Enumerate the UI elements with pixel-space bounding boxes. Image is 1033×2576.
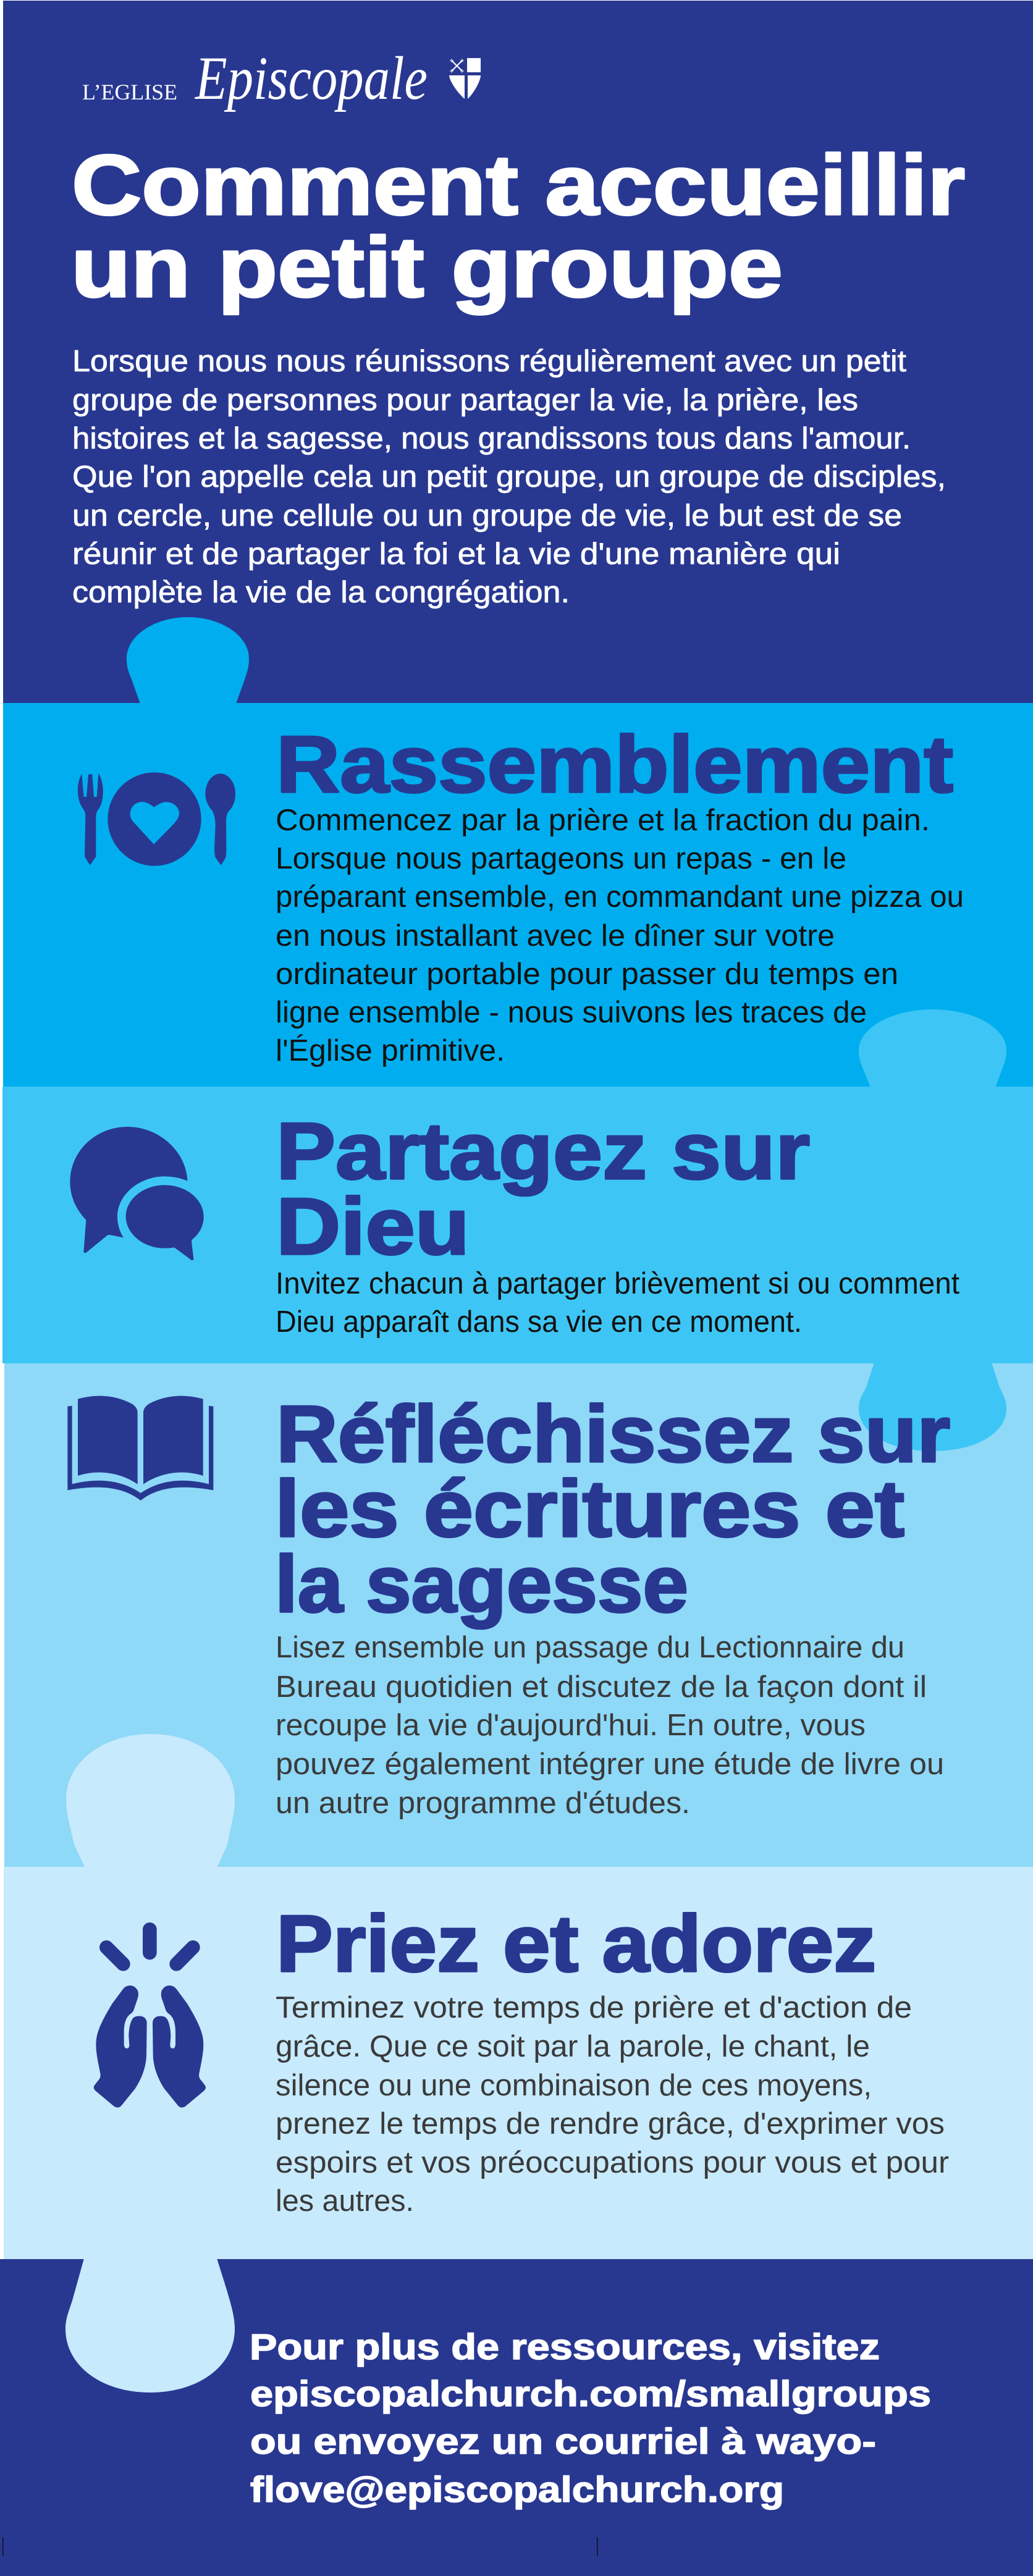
body text: Réfléchissez: recoupe la vie d'aujourd'hui. En outre, vous xyxy=(276,1709,866,1742)
body text: Rassemblement: en nous installant avec le dîner sur votre xyxy=(276,919,835,953)
footer call to action xyxy=(250,2327,931,2510)
body text: Rassemblement: Commencez par la prière et la fraction du pain. xyxy=(276,804,930,837)
title: Comment accueillir xyxy=(72,138,965,233)
panel: intro header xyxy=(3,1,1033,704)
intro text: un cercle, une cellule ou un groupe de vie, le but est de se xyxy=(72,499,902,532)
body text: Réfléchissez: un autre programme d'études. xyxy=(276,1787,690,1820)
panel: Rassemblement xyxy=(3,617,1033,1087)
logo: L'Eglise Episcopale xyxy=(82,44,481,112)
body text: Rassemblement: l'Église primitive. xyxy=(276,1034,505,1067)
heading: Partagez sur Dieu: Partagez sur xyxy=(276,1106,810,1196)
heading: Partagez sur Dieu xyxy=(276,1106,810,1271)
logo: L'Eglise Episcopale: Episcopale xyxy=(194,44,428,112)
body text: Priez et adorez: prenez le temps de rendre grâce, d'exprimer vos xyxy=(276,2107,945,2140)
body text: Priez et adorez: Terminez votre temps de prière et d'action de xyxy=(276,1991,912,2024)
intro text: groupe de personnes pour partager la vie, la prière, les xyxy=(72,384,858,417)
body text: Réfléchissez: Bureau quotidien et discutez de la façon dont il xyxy=(276,1670,927,1704)
puzzle tab: Priez down xyxy=(65,2258,235,2393)
intro text: réunir et de partager la foi et la vie d'une manière qui xyxy=(72,537,840,571)
heading: Priez et adorez: Priez et adorez xyxy=(276,1898,876,1989)
icon: speech bubbles xyxy=(70,1127,204,1260)
body text: Réfléchissez: Lisez ensemble un passage du Lectionnaire du xyxy=(276,1631,904,1664)
footer call to action: flove@episcopalchurch.org xyxy=(250,2470,784,2510)
body text: Rassemblement xyxy=(276,804,964,1067)
puzzle tab: Partagez down xyxy=(859,1363,1006,1451)
title: un petit groupe xyxy=(71,220,783,315)
icon: open book xyxy=(67,1396,213,1501)
panel: Partagez sur Dieu xyxy=(2,1009,1033,1363)
intro text: Lorsque nous nous réunissons régulièrement avec un petit xyxy=(72,345,906,378)
footer call to action: episcopalchurch.com/smallgroups xyxy=(250,2374,931,2414)
body text: Priez et adorez: espoirs et vos préoccupations pour vous et pour xyxy=(276,2146,949,2179)
footer call to action: ou envoyez un courriel à wayo- xyxy=(250,2422,876,2462)
heading: Réfléchissez: la sagesse xyxy=(275,1539,688,1629)
body text: Rassemblement: préparant ensemble, en commandant une pizza ou xyxy=(276,880,964,914)
puzzle tab: Priez up xyxy=(66,1734,235,1868)
puzzle tab: Partagez up xyxy=(859,1009,1006,1087)
intro text xyxy=(72,345,946,609)
panel: footer xyxy=(0,2258,1033,2576)
body text: Priez et adorez: les autres. xyxy=(276,2184,414,2218)
footer call to action: Pour plus de ressources, visitez xyxy=(250,2327,880,2367)
body text: Rassemblement: ligne ensemble - nous suivons les traces de xyxy=(276,996,867,1029)
title xyxy=(71,138,965,315)
body text: Priez et adorez xyxy=(276,1991,949,2218)
panel: Priez et adorez xyxy=(4,1734,1033,2259)
logo: L'Eglise Episcopale: L’EGLISE xyxy=(82,80,177,104)
body text: Réfléchissez xyxy=(276,1631,944,1820)
body text: Rassemblement: Lorsque nous partageons un repas - en le xyxy=(276,842,846,875)
heading: Rassemblement: Rassemblement xyxy=(276,719,953,809)
body text: Réfléchissez: pouvez également intégrer une étude de livre ou xyxy=(276,1748,944,1781)
body text: Priez et adorez: grâce. Que ce soit par la parole, le chant, le xyxy=(276,2030,870,2063)
intro text: histoires et la sagesse, nous grandissons tous dans l'amour. xyxy=(72,422,911,455)
body text: Partagez sur Dieu: Dieu apparaît dans sa vie en ce moment. xyxy=(276,1305,802,1339)
heading: Partagez sur Dieu: Dieu xyxy=(276,1181,470,1271)
intro text: complète la vie de la congrégation. xyxy=(72,576,570,609)
icon: plate with heart, fork and spoon xyxy=(78,772,235,866)
body text: Rassemblement: ordinateur portable pour passer du temps en xyxy=(276,958,898,991)
body text: Partagez sur Dieu xyxy=(276,1267,959,1339)
puzzle tab: Rassemblement xyxy=(127,617,249,704)
icon: praying hands xyxy=(94,1929,206,2108)
intro text: Que l'on appelle cela un petit groupe, un groupe de disciples, xyxy=(72,460,946,494)
body text: Priez et adorez: silence ou une combinaison de ces moyens, xyxy=(276,2069,872,2102)
heading: Réfléchissez xyxy=(275,1389,950,1629)
panel: Réfléchissez xyxy=(4,1363,1033,1867)
body text: Partagez sur Dieu: Invitez chacun à partager brièvement si ou comment xyxy=(276,1267,959,1300)
heading: Réfléchissez: les écritures et xyxy=(275,1463,904,1554)
heading: Réfléchissez: Réfléchissez sur xyxy=(276,1389,950,1479)
